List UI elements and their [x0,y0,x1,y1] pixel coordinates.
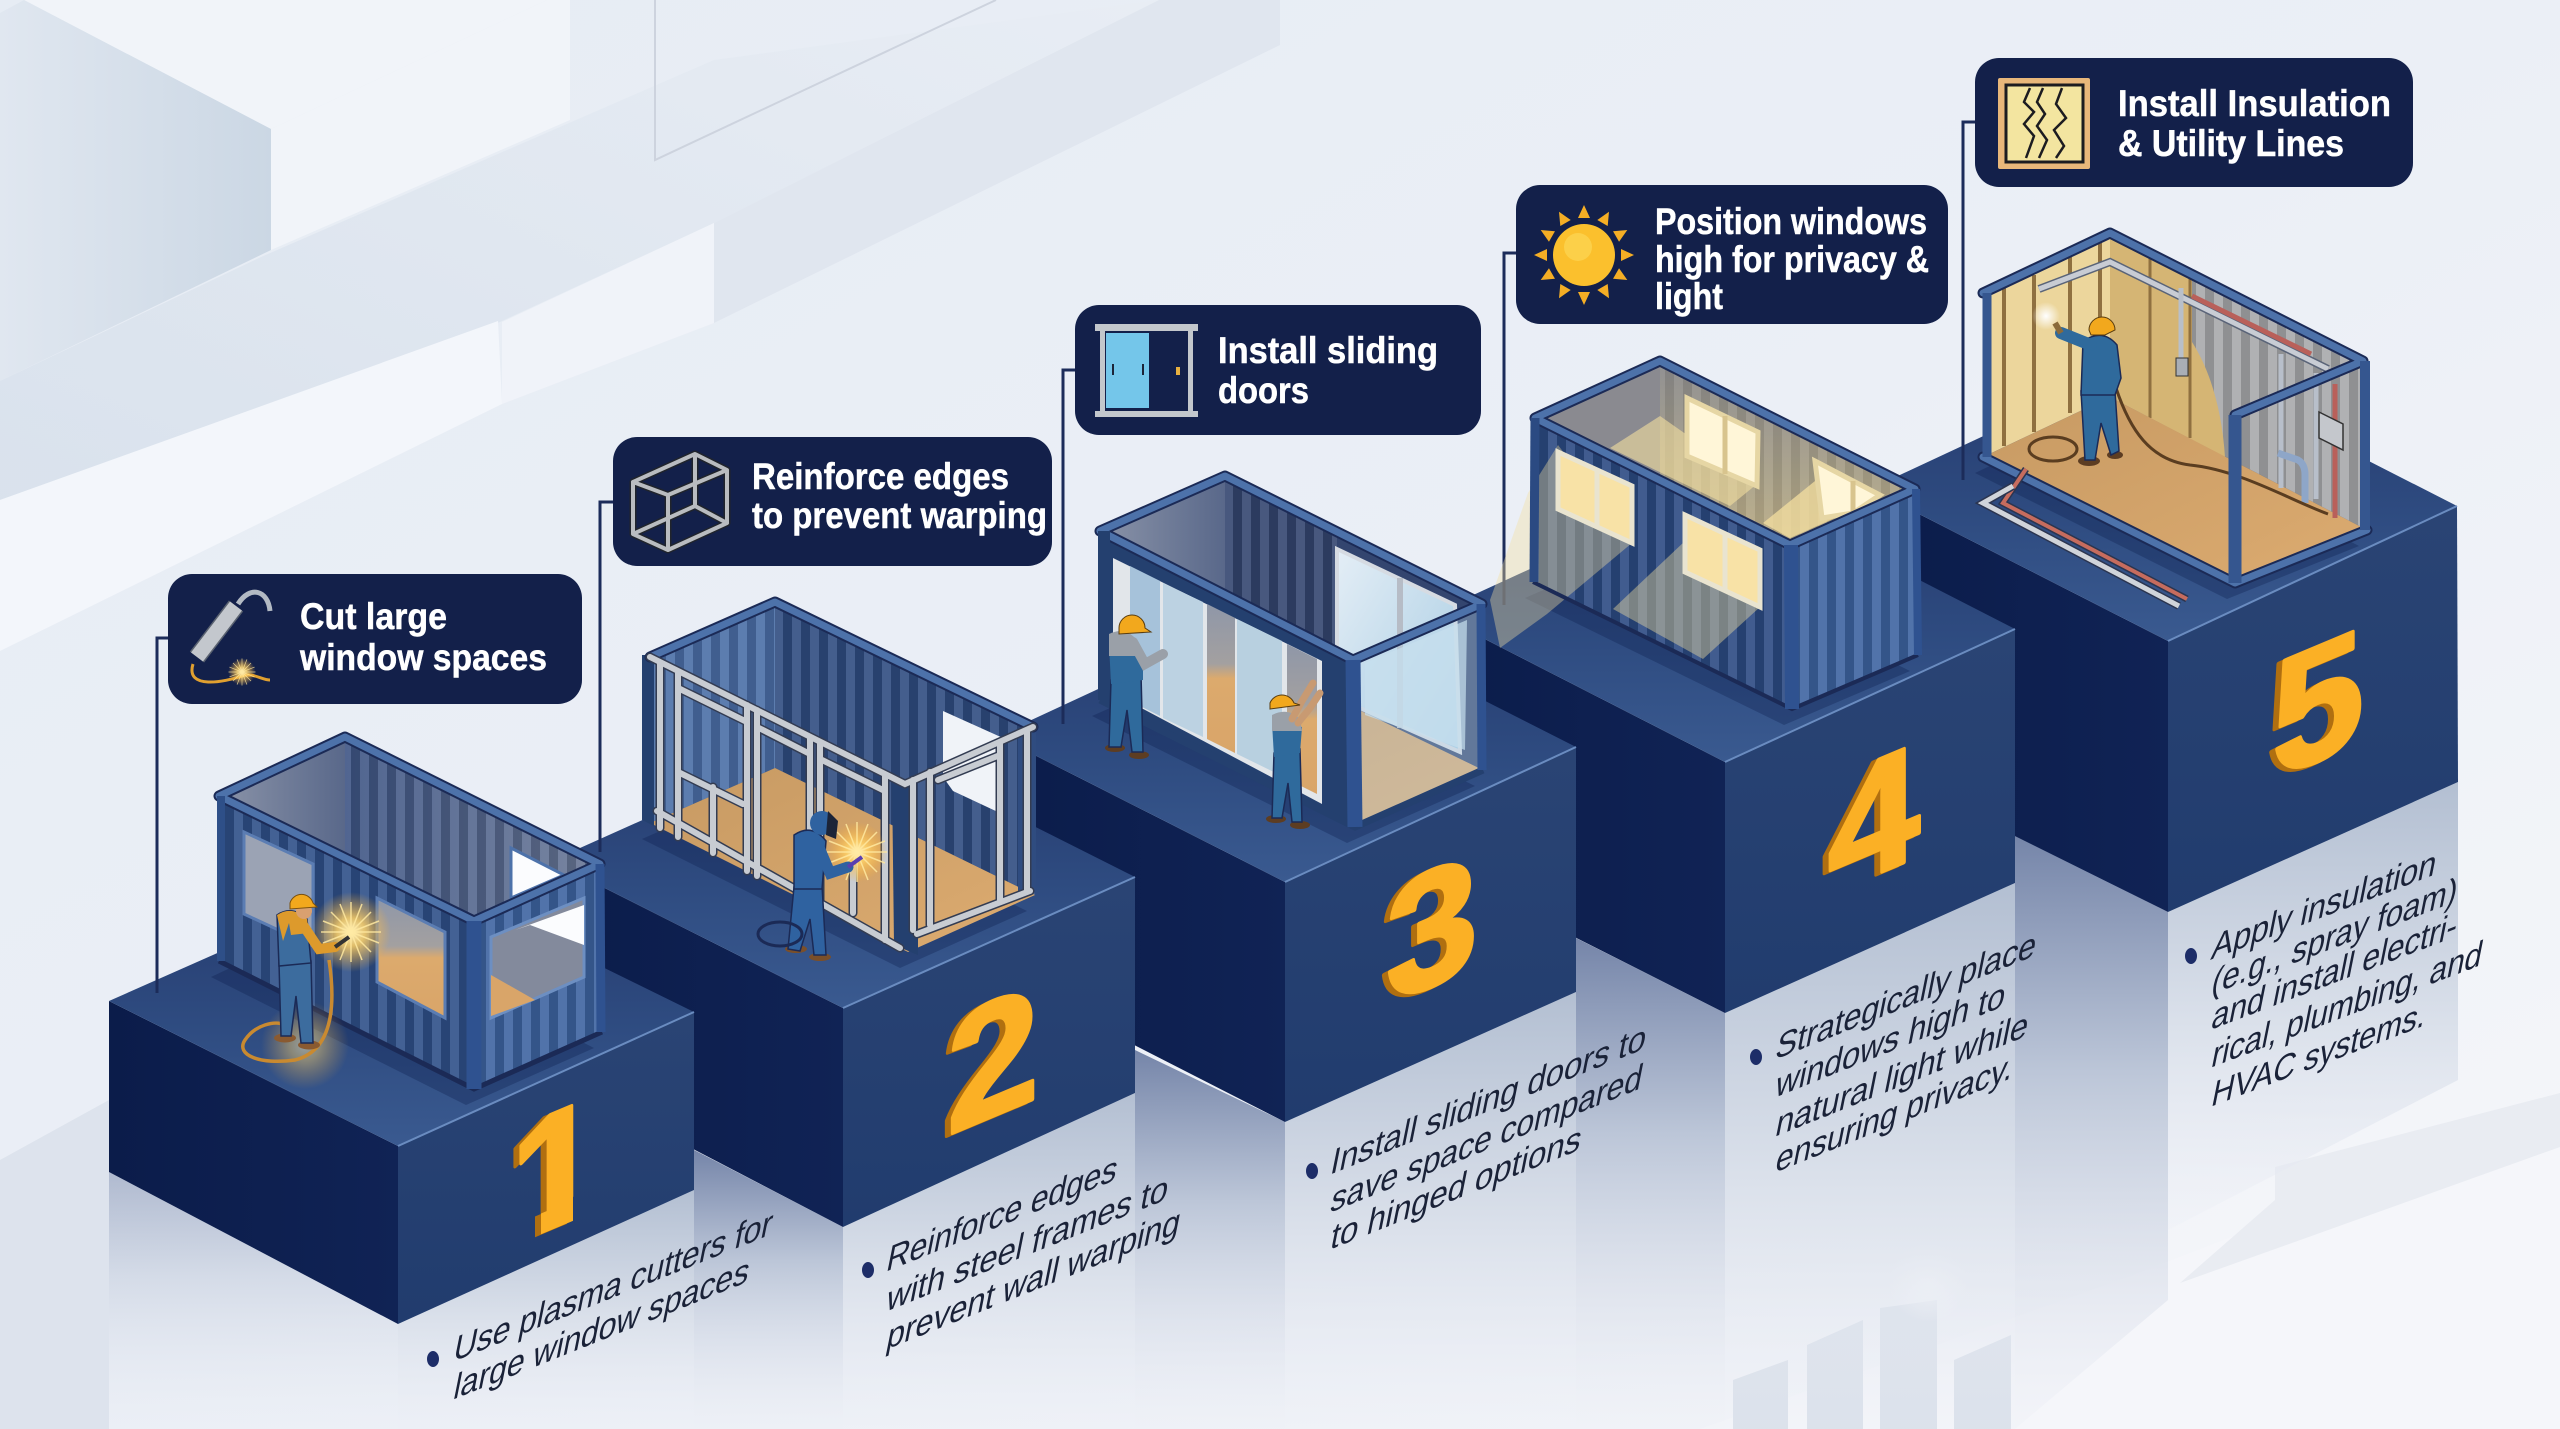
callout 2: Reinforce edges [752,456,1009,497]
caption 5: HVAC systems. [2208,993,2431,1116]
callout 4: Position windows [1655,201,1927,242]
worker 5 [2055,317,2123,466]
callout 3: Install sliding [1218,330,1438,371]
caption 3 [1306,1017,1650,1259]
step 5 plinth [1870,354,2458,912]
caption 2: prevent wall warping [883,1200,1184,1359]
icon: plasma torch [192,592,270,686]
number 1: 1 [504,1061,596,1284]
caption 2: with steel frames to [882,1167,1172,1321]
container 4: high windows [1490,361,1918,725]
step 3 plinth [997,601,1576,1122]
number 1 [513,1104,574,1238]
callout 1 [168,574,582,704]
number 5: 5 [2266,595,2358,818]
caption 5: (e.g., spray foam) [2208,869,2462,1004]
welding spark 2 [827,822,887,882]
callout 2 [613,437,1052,566]
worker 1 [274,894,349,1050]
caption 3: Install sliding doors to [1327,1017,1650,1184]
icon: sliding door [1095,324,1198,417]
icon: insulation batt [1998,78,2090,169]
number 4: 4 [1822,710,1914,933]
callout 4 [1516,185,1948,324]
step 4 plinth [1434,480,2015,1013]
icon: steel frame cube [633,454,727,550]
caption 1: Use plasma cutters for [450,1202,777,1371]
step 1 plinth [109,870,694,1324]
utility pipes [1983,469,2187,606]
number 4: 4 [1828,707,1920,930]
plinth reflections [0,782,2458,1429]
caption 1: large window spaces [450,1250,753,1409]
callout 3: doors [1218,370,1309,411]
plasma spark [311,892,391,972]
number 2: 2 [941,951,1033,1174]
caption 4: Strategically place [1772,924,2040,1069]
caption 5: Apply insulation [2208,842,2441,969]
floor glow and hose [243,960,349,1089]
callout 3 [1075,305,1481,435]
caption 5: rical, plumbing, and [2208,933,2487,1077]
caption 4: natural light while [1772,1004,2032,1146]
callout 4: light [1655,276,1723,317]
callout 1: Cut large [300,596,447,637]
callout 5 [1975,58,2413,187]
callout 2: to prevent warping [752,495,1047,536]
number 5: 5 [2272,592,2364,815]
callout 4: high for privacy & [1655,239,1929,280]
caption 3: save space compared [1327,1056,1646,1222]
number 1: 1 [510,1058,602,1281]
number 3: 3 [1386,817,1478,1040]
worker 3a [1105,615,1163,759]
worker 3b [1266,683,1320,829]
callout 5: Install Insulation [2118,83,2391,124]
container 3: sliding doors [1092,476,1483,843]
number 2: 2 [947,948,1039,1171]
icon: sun [1534,205,1634,305]
container 5: insulation [1975,233,2367,606]
caption 3: to hinged options [1327,1118,1585,1259]
caption 2: Reinforce edges [883,1148,1121,1281]
container 2: steel frame [642,602,1036,968]
worker 2 [785,811,862,961]
step 2 plinth [551,730,1135,1227]
leader lines [157,122,1975,993]
container 1: plasma cutting [211,737,602,1105]
callout 5: & Utility Lines [2118,123,2344,164]
caption 5 [2185,842,2487,1116]
caption 4: windows high to [1771,974,2009,1107]
number 3: 3 [1380,820,1472,1043]
caption 4: ensuring privacy. [1772,1046,2017,1182]
caption 5: and install electri- [2208,904,2462,1039]
callout 1: window spaces [299,637,547,678]
caption 4 [1750,924,2040,1182]
